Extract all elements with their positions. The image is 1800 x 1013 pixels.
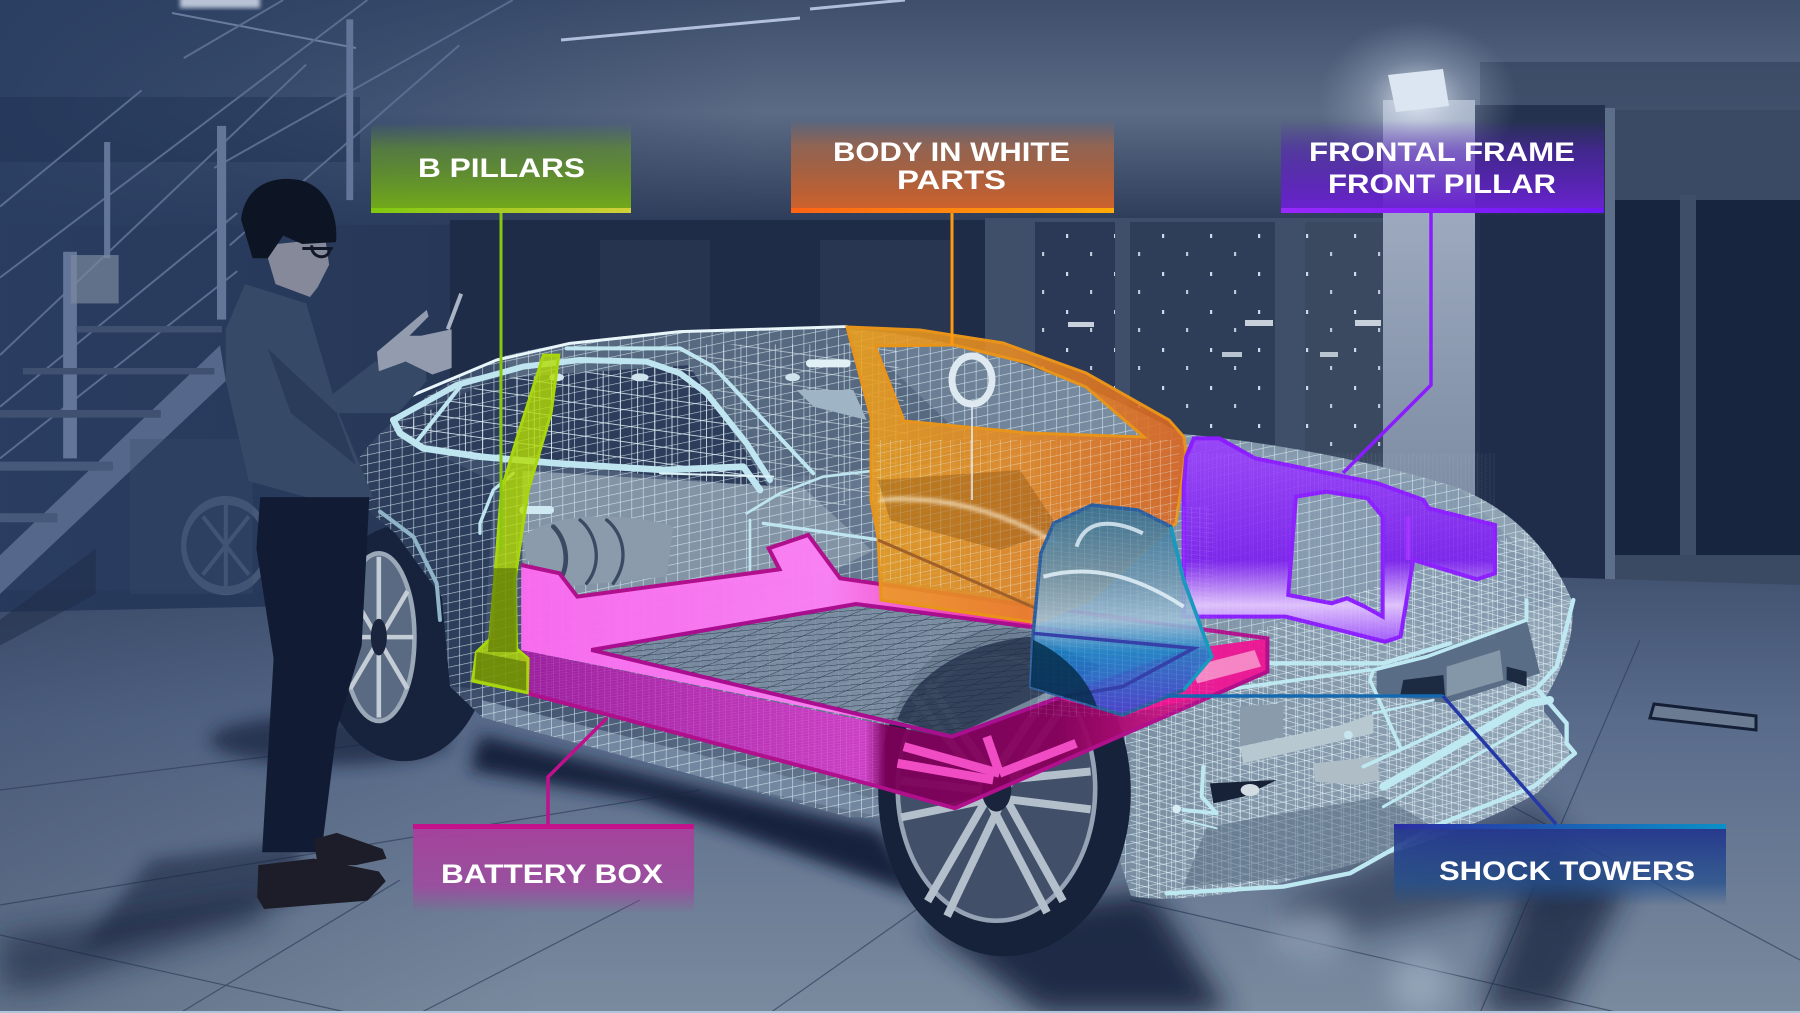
engine bay tone [522,471,872,597]
callout: b pillars [371,123,631,550]
hood tone [1476,510,1570,632]
spare wheel against wall [184,500,268,591]
person shoes [257,833,387,909]
cabin and rear wires [380,327,880,620]
car shadow on floor [0,715,1630,1013]
part: battery box [521,535,1267,808]
callout: body in white parts [791,120,1114,345]
callout: frontal frame front pillar: FRONTAL FRAME [1309,137,1575,167]
staircase [0,0,513,646]
person head [241,179,336,297]
ceiling light [1318,20,1518,180]
part: b pillar [473,355,559,693]
ceiling strip lights [172,0,905,48]
glow wires [1167,600,1575,893]
light patches on floor [1270,909,1450,1013]
callout: body in white parts: PARTS [897,165,1006,195]
center vent [1240,703,1283,747]
stair stringer [0,345,226,594]
rim spokes through panel [897,737,1076,780]
callout: frontal frame front pillar: FRONT PILLAR [1328,169,1556,199]
floor hatch [1650,704,1756,730]
glow wires [413,327,847,395]
battery cell grid [591,604,1194,737]
side panel [521,650,1210,808]
person trousers [256,497,369,852]
stair posts and treads [0,19,353,522]
person hands and phone [377,310,452,374]
floor tile lines [0,640,1800,1013]
outline [521,535,1267,808]
engine cylinders [523,517,673,587]
front wheel [878,628,1131,956]
right end [1057,638,1267,715]
part: body in white door frame [847,327,1186,623]
callout: shock towers [1166,696,1726,906]
right cabinets [1475,105,1800,598]
callout: b pillars: B PILLARS [418,153,585,183]
light column [1383,100,1475,510]
side mesh [521,650,878,787]
front bumper wires [1167,600,1575,893]
callout: frontal frame front pillar [1281,120,1604,473]
cabin interior [396,365,769,488]
ceiling [0,0,1800,225]
callout: shock towers: SHOCK TOWERS [1439,856,1695,886]
wireframe car [318,310,1596,918]
lower lip tone [1183,797,1433,887]
part: frontal frame front pillar [1184,438,1495,642]
door mesh and floating gauge [875,356,1180,610]
top rail [521,535,1038,737]
person [226,179,461,909]
callout: body in white parts: BODY IN WHITE [833,137,1070,167]
roof tone [506,329,950,478]
callout: battery box: BATTERY BOX [441,859,663,889]
rear quarter tone [388,444,494,689]
car body mesh [344,310,1596,918]
sill tone [482,700,895,817]
callout: battery box [413,718,694,913]
floor [0,560,1800,1013]
rear wheel [318,525,490,761]
part: shock towers [1031,505,1214,717]
person shirt [226,284,427,497]
grille [1377,620,1540,703]
back wall cabinets [450,218,1385,610]
